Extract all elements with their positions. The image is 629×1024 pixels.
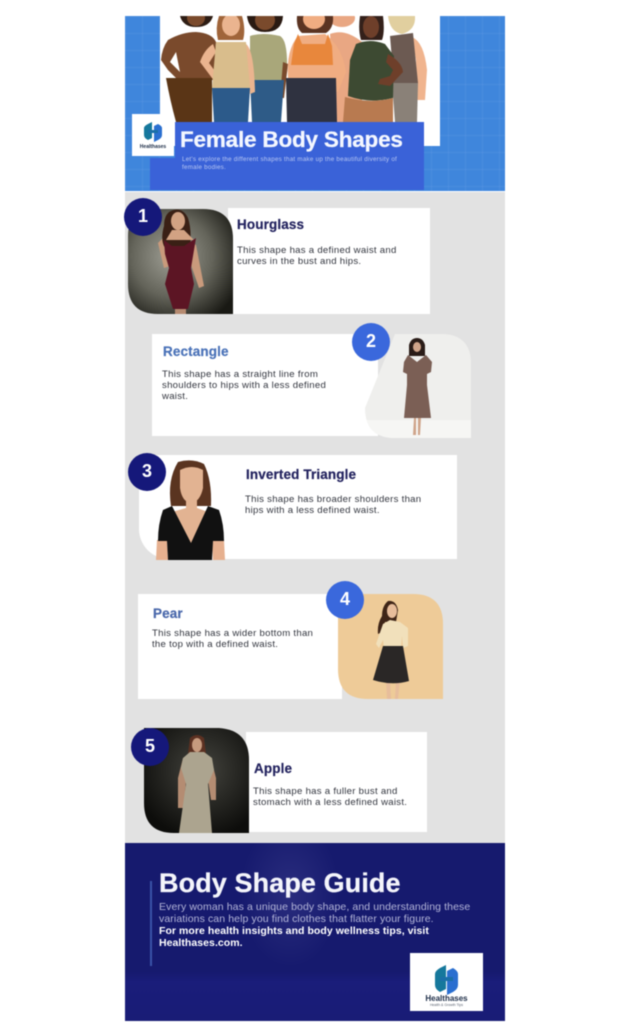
description [252,786,407,808]
description: waist. [162,391,188,402]
image: woman with black skirt on tan [337,594,444,700]
badge: 2: 2 [366,331,376,351]
subtitle text: female bodies. [182,164,226,171]
panel: footer [125,843,505,1021]
logo: footer: Healthases [425,994,468,1003]
heading: Female Body Shapes: Female Body Shapes [180,127,403,152]
card background [246,732,427,832]
badge: 4: 4 [340,589,350,609]
panel: pear [138,580,444,700]
heading: Body Shape Guide: Body Shape Guide [159,868,401,898]
description: This shape has a wider bottom than [152,628,313,639]
card background [228,208,430,314]
badge: 1: 1 [138,206,148,226]
heading: Inverted Triangle: Inverted Triangle [246,467,356,482]
image: woman in maroon dress [127,208,234,315]
badge: 1 [124,198,162,236]
heading: Hourglass: Hourglass [237,217,304,232]
panel: title banner [150,158,424,190]
heading: Apple: Apple [254,761,292,776]
description: hips with a less defined waist. [245,505,380,516]
description [158,901,470,949]
badge: 3: 3 [142,461,152,481]
panel: rectangle [152,322,471,438]
accent line [150,881,152,966]
badge: 4 [326,581,364,619]
description [244,494,422,516]
description: This shape has a straight line from [162,369,318,380]
badge: 2 [352,323,390,361]
description: Every woman has a unique body shape, and understanding these [159,901,470,913]
panel: apple [130,727,428,834]
card background [138,594,342,699]
description: the top with a defined waist. [152,639,278,650]
logo: header: Healthases [140,144,166,150]
illustration: group of diverse women [159,15,441,147]
heading: Rectangle: Rectangle [163,344,229,359]
badge: 3 [128,453,166,491]
logo: footer: Health & Growth Tips [430,1003,463,1007]
title [175,122,424,190]
card background [139,455,457,559]
panel: body shapes background [125,192,505,843]
subtitle text [182,156,398,171]
logo: footer [410,953,483,1011]
heading: Pear: Pear [153,606,183,621]
image: woman in brown dress [365,334,471,438]
description: This shape has a fuller bust and [253,786,398,797]
card background [152,334,378,436]
badge: 5: 5 [145,736,155,756]
panel: header [125,16,505,191]
panel: inverted triangle [127,452,458,561]
description [161,369,326,402]
description: curves in the bust and hips. [237,256,361,267]
description: variations can help you find clothes that flatter your figure. [159,913,434,925]
description: This shape has broader shoulders than [245,494,421,505]
subtitle text: Let's explore the different shapes that make up the beautiful diversity of [182,156,397,163]
description [152,628,313,650]
description: This shape has a defined waist and [237,245,397,256]
image: woman in black top [156,460,226,561]
image: woman in beige dress [143,727,250,834]
description: stomach with a less defined waist. [253,797,407,808]
badge: 5 [131,728,169,766]
description: For more health insights and body wellness tips, visit [159,925,429,937]
description: Healthases.com. [159,937,243,949]
description: shoulders to hips with a less defined [162,380,326,391]
description [236,245,397,267]
logo: header [132,114,174,156]
panel: hourglass [123,197,430,315]
